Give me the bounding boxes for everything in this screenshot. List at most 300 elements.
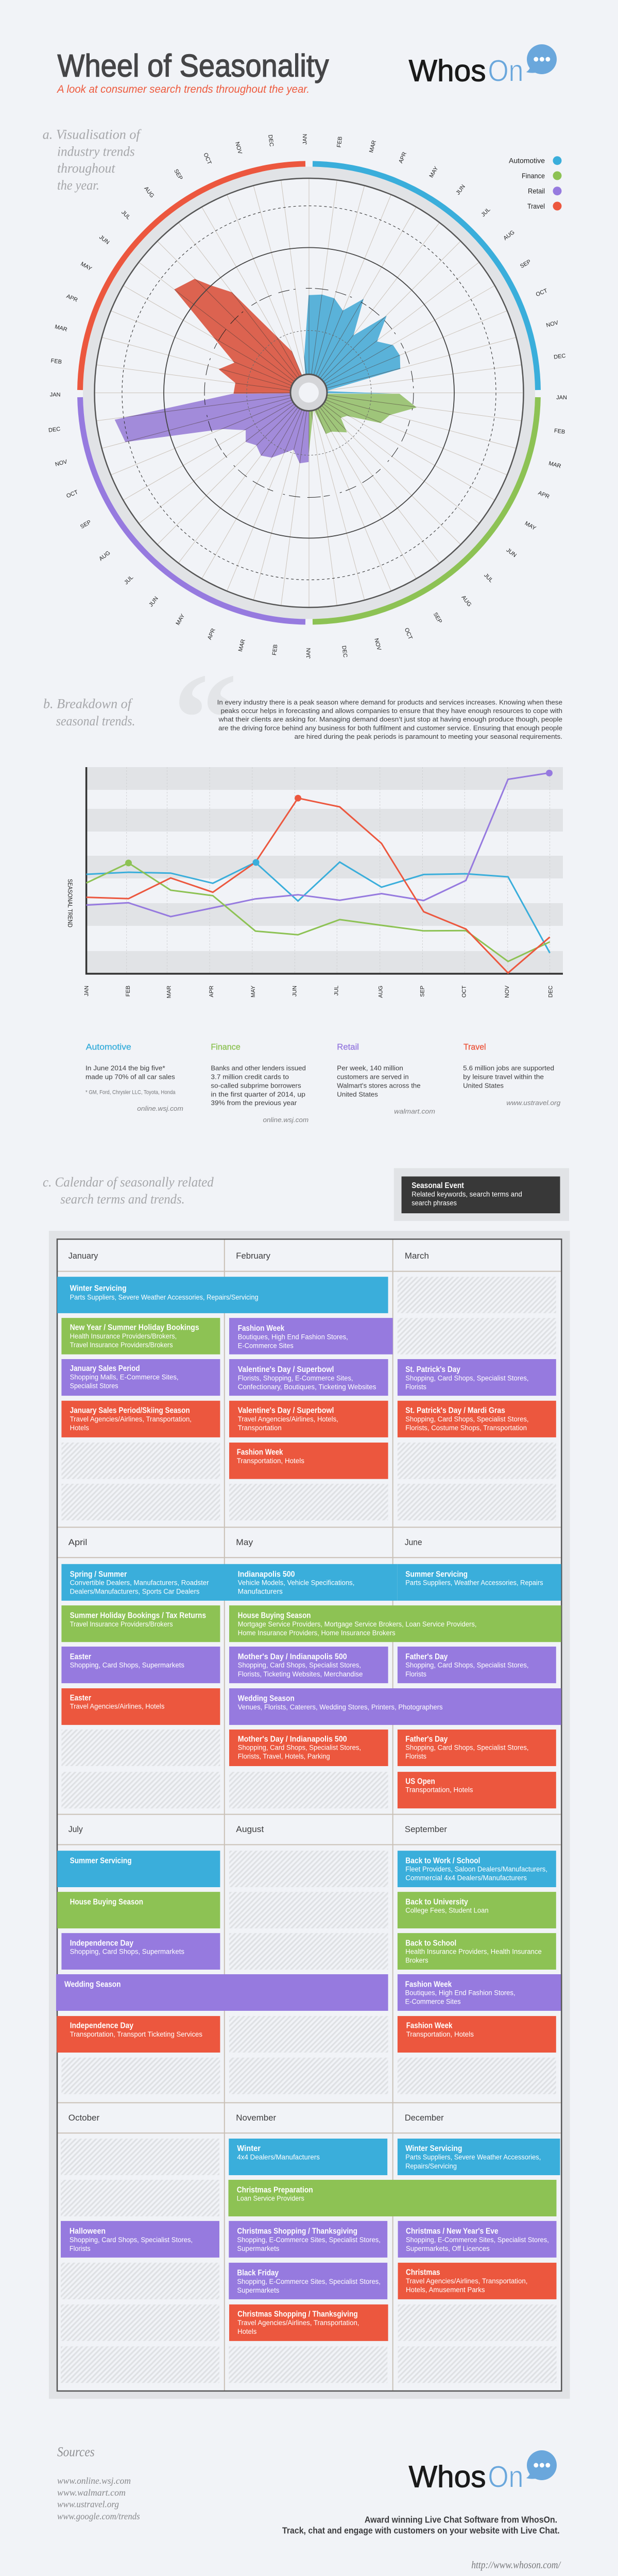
grey ring band — [89, 172, 529, 613]
event: Mother's Day / Indianapolis 500 (travel) — [229, 1730, 388, 1766]
legend: industries: Automotive — [509, 157, 545, 165]
event: Christmas Preparation: Christmas Preparation — [237, 2185, 313, 2194]
event: Valentine's Day / Superbowl (travel): Valentine's Day / Superbowl — [238, 1406, 334, 1415]
month headers: August — [236, 1824, 264, 1834]
stat: travel: by leisure travel within the — [463, 1073, 544, 1081]
event: January Sales Period: Specialist Stores — [70, 1382, 118, 1389]
x axis month labels: AUG — [377, 986, 384, 998]
event: St. Patrick's Day / Mardi Gras: Shopping, Card Shops, Specialist Stores, — [405, 1415, 528, 1423]
event: Wedding Season (May-June): Wedding Season — [238, 1694, 295, 1703]
stat: automotive: online.wsj.com — [137, 1105, 183, 1112]
month labels around wheel: MAR — [54, 324, 68, 333]
wedge: finance — [308, 393, 417, 455]
month labels around wheel: FEB — [554, 428, 565, 435]
event: House Buying Season (July): House Buying Season — [70, 1898, 143, 1906]
month labels around wheel: NOV — [545, 319, 559, 329]
event: House Buying Season (July) — [57, 1892, 220, 1928]
stat: finance: online.wsj.com — [263, 1116, 308, 1124]
event: Summer Servicing (July): Summer Servicing — [70, 1857, 132, 1865]
event: Back to University: Back to University — [405, 1898, 468, 1906]
month headers — [68, 1251, 447, 2123]
stat: retail: Walmart's stores across the — [337, 1082, 421, 1090]
event: House Buying Season (May-June): House Buying Season — [238, 1612, 311, 1620]
event: Father's Day (retail) — [398, 1647, 556, 1683]
event: Christmas Shopping / Thanksgiving (travel): Christmas Shopping / Thanksgiving — [237, 2310, 358, 2319]
x axis month labels — [83, 985, 554, 998]
event: Spring / Summer: Spring / Summer — [70, 1570, 127, 1579]
intro paragraph: what their clients are asking for. Managing demand doesn’t just stop at having enough produce though, people — [218, 716, 562, 723]
spokes over wedges — [125, 279, 416, 464]
event: Winter Servicing (December): Parts Suppliers, Severe Weather Accessories, — [405, 2154, 541, 2161]
month labels around wheel: MAY — [524, 520, 537, 532]
wedge: retail — [115, 393, 309, 463]
month labels around wheel: AUG — [460, 595, 472, 608]
stat: retail: walmart.com — [394, 1108, 435, 1115]
section c heading — [43, 1175, 214, 1207]
event: Fashion Week (Feb travel): Transportation, Hotels — [237, 1457, 304, 1465]
month labels around wheel: SEP — [79, 519, 92, 530]
event: Black Friday: Black Friday — [237, 2269, 279, 2278]
x axis month labels: JUN — [292, 986, 298, 996]
event: Easter (travel) — [61, 1688, 220, 1725]
month labels around wheel: DEC — [340, 645, 348, 658]
month headers: January — [68, 1251, 98, 1261]
stat: automotive: In June 2014 the big five* — [85, 1064, 165, 1072]
event: Valentine's Day / Superbowl (retail) — [229, 1359, 388, 1396]
calendar frame — [49, 1231, 570, 2399]
event: Christmas / New Year's Eve — [398, 2221, 556, 2258]
event: Halloween: Halloween — [70, 2227, 106, 2236]
month labels around wheel: JUN — [148, 596, 160, 608]
chart bands — [87, 767, 563, 973]
month labels around wheel: MAR — [237, 638, 247, 652]
event: Winter Servicing (December): Repairs/Servicing — [405, 2162, 457, 2170]
event: Fashion Week (Feb travel) — [229, 1443, 388, 1479]
section a heading — [43, 127, 142, 193]
event: Valentine's Day / Superbowl (retail): Florists, Shopping, E-Commerce Sites, — [238, 1374, 353, 1382]
event: Back to School: Health Insurance Providers, Health Insurance — [405, 1947, 542, 1956]
footer tagline: Award winning Live Chat Software from WhosOn. — [365, 2515, 557, 2525]
event: Halloween: Florists — [70, 2245, 91, 2252]
sources: www.walmart.com — [57, 2487, 126, 2498]
month labels around wheel: MAR — [368, 140, 377, 154]
event: Back to University — [398, 1892, 556, 1928]
footer url: http://www.whoson.com/ — [471, 2560, 561, 2571]
event: Father's Day (travel): Florists — [405, 1753, 426, 1760]
event: Halloween: Shopping, Card Shops, Specialist Stores, — [70, 2236, 193, 2244]
intro paragraph — [217, 699, 562, 740]
event: Wedding Season (May-June) — [229, 1688, 561, 1725]
event: Back to School — [398, 1933, 556, 1970]
month labels around wheel: JUL — [123, 574, 134, 586]
month labels around wheel: MAY — [428, 165, 440, 179]
retail arc — [80, 397, 305, 622]
event: Back to Work / School: Back to Work / School — [405, 1857, 480, 1865]
stat: automotive: * GM, Ford, Chrysler LLC, Toyota, Honda — [85, 1089, 176, 1095]
event: Winter — [229, 2139, 387, 2175]
x axis month labels: DEC — [547, 986, 554, 997]
event: January Sales Period: January Sales Period — [70, 1364, 140, 1373]
wheel of seasonality chart — [48, 134, 567, 658]
line chart: seasonal trends — [66, 767, 563, 998]
event: Back to School: Brokers — [405, 1957, 428, 1964]
intro paragraph: are hired during the peak periods is paramount to meeting your seasonal requirements. — [295, 733, 562, 740]
sources: www.online.wsj.com — [57, 2476, 131, 2486]
event: St. Patrick's Day (retail) — [398, 1359, 556, 1396]
section c heading: search terms and trends. — [60, 1192, 185, 1207]
event: Christmas Shopping / Thanksgiving (travel): Travel Agencies/Airlines, Transportation, — [237, 2319, 359, 2327]
series: travel — [87, 798, 550, 973]
event: Summer Holiday Bookings / Tax Returns: Summer Holiday Bookings / Tax Returns — [70, 1612, 206, 1620]
month labels around wheel: APR — [398, 151, 408, 164]
event: St. Patrick's Day (retail): St. Patrick's Day — [405, 1365, 460, 1374]
x axis month labels: NOV — [504, 985, 510, 998]
month labels around wheel: FEB — [271, 644, 279, 656]
month headers: September — [405, 1824, 447, 1834]
event: Summer Holiday Bookings / Tax Returns: Travel Insurance Providers/Brokers — [70, 1620, 173, 1628]
section a heading: industry trends — [57, 144, 135, 159]
stat: travel — [463, 1042, 561, 1107]
month labels around wheel: JUL — [483, 572, 494, 584]
event: Valentine's Day / Superbowl (travel): Travel Angencies/Airlines, Hotels, — [238, 1415, 338, 1423]
y axis label: SEASONAL TREND — [66, 879, 74, 927]
peak markers — [125, 770, 553, 867]
event: Independence Day (retail): Independence Day — [70, 1939, 133, 1947]
sources: www.google.com/trends — [57, 2511, 140, 2521]
intro paragraph: are the driving force behind any business for both fulfilment and customer service. Ensuring that enough people — [218, 724, 562, 732]
wedge: travel — [174, 279, 309, 394]
event: Christmas Shopping / Thanksgiving (retail): Shopping, E-Commerce Sites, Specialist Stores, — [237, 2236, 381, 2244]
legend: industries: Travel — [527, 202, 545, 210]
stat: finance: Finance — [211, 1042, 241, 1052]
x axis month labels: OCT — [461, 986, 468, 997]
event: House Buying Season (May-June): Home Insurance Providers, Home Insurance Brokers — [238, 1629, 396, 1637]
icon: large quotation mark: “ — [173, 647, 237, 790]
stat: finance — [211, 1042, 308, 1124]
section c heading: c. Calendar of seasonally related — [43, 1175, 214, 1190]
legend: industries — [509, 156, 561, 210]
event: Independence Day (travel): Independence Day — [70, 2021, 133, 2030]
event: Back to Work / School — [398, 1851, 556, 1887]
event: January Sales Period: Shopping Malls, E-Commerce Sites, — [70, 1373, 179, 1381]
event: Father's Day (travel): Shopping, Card Shops, Specialist Stores, — [405, 1744, 528, 1752]
event: Fashion Week (Feb retail): Fashion Week — [238, 1324, 285, 1333]
event: US Open: Transportation, Hotels — [405, 1786, 473, 1794]
month labels around wheel: DEC — [267, 134, 274, 147]
event: Mother's Day / Indianapolis 500 (travel): Shopping, Card Shops, Specialist Stores, — [238, 1744, 361, 1752]
month headers: July — [68, 1824, 83, 1834]
series: retail — [87, 773, 550, 917]
month headers: November — [236, 2113, 276, 2123]
event: Summer Servicing (July) — [57, 1851, 220, 1887]
event: Christmas (travel) — [398, 2263, 556, 2299]
stat: automotive — [85, 1042, 183, 1112]
event: Father's Day (retail): Shopping, Card Shops, Specialist Stores, — [405, 1662, 528, 1669]
month labels around wheel: DEC — [48, 426, 61, 434]
wedge: automotive — [304, 295, 400, 394]
event: Easter (retail) — [61, 1647, 220, 1683]
month labels around wheel: JAN — [305, 648, 312, 658]
event: Fashion Week (Feb retail): Boutiques, High End Fashion Stores, — [238, 1333, 348, 1341]
month headers: May — [236, 1537, 253, 1547]
event: January Sales Period/Skiing Season: Hotels — [70, 1424, 89, 1432]
event: Christmas Shopping / Thanksgiving (travel) — [229, 2304, 388, 2341]
x axis month labels: MAY — [250, 985, 256, 997]
x axis month labels: MAR — [166, 986, 172, 998]
event: Independence Day (retail) — [61, 1933, 220, 1970]
month labels around wheel: NOV — [55, 459, 68, 468]
event: Christmas (travel): Christmas — [406, 2268, 440, 2277]
x axis month labels: FEB — [125, 986, 131, 996]
stat: finance: Banks and other lenders issued — [211, 1064, 306, 1072]
event: Easter (retail): Easter — [70, 1653, 91, 1661]
event: Valentine's Day / Superbowl (travel) — [229, 1401, 388, 1437]
event: Summer Servicing (June) — [397, 1564, 561, 1601]
event: Mother's Day / Indianapolis 500 (travel): Mother's Day / Indianapolis 500 — [238, 1735, 347, 1743]
event: Summer Servicing (June): Parts Suppliers, Weather Accessories, Repairs — [405, 1579, 543, 1587]
month labels around wheel: JAN — [556, 395, 567, 401]
event: Spring / Summer — [61, 1564, 229, 1601]
event: Independence Day (retail): Shopping, Card Shops, Supermarkets — [70, 1947, 184, 1956]
legend: seasonal event key: search phrases — [411, 1199, 457, 1207]
event: Winter Servicing: Winter Servicing — [70, 1284, 127, 1293]
title block — [56, 48, 329, 95]
event: Back to Work / School: Fleet Providers, Saloon Dealers/Manufacturers, — [405, 1865, 547, 1873]
stat: finance: 39% from the previous year — [211, 1099, 297, 1107]
x axis month labels: JUL — [334, 986, 340, 996]
stat: finance: so-called subprime borrowers — [211, 1082, 301, 1090]
centre hub — [290, 374, 327, 411]
month headers: December — [405, 2113, 444, 2123]
logo: WhosOn footer: On — [488, 2460, 523, 2494]
month labels around wheel: AUG — [143, 185, 155, 199]
x axis month labels: JAN — [83, 986, 90, 996]
x axis month labels: APR — [209, 986, 215, 997]
footer tagline: Track, chat and engage with customers on your website with Live Chat. — [282, 2526, 560, 2536]
month labels around wheel: DEC — [554, 353, 566, 361]
month labels around wheel: JUL — [120, 209, 131, 221]
legend: industries: Retail — [528, 187, 545, 195]
section b heading: b. Breakdown of — [43, 697, 133, 711]
event: Indianapolis 500: Manufacturers — [238, 1588, 283, 1596]
stat: automotive: Automotive — [86, 1042, 131, 1052]
event: Winter Servicing — [57, 1277, 388, 1313]
logo: WhosOn footer — [409, 2450, 557, 2494]
month headers: October — [68, 2113, 99, 2123]
event: Easter (retail): Shopping, Card Shops, Supermarkets — [70, 1662, 184, 1669]
month labels around wheel: NOV — [373, 638, 382, 651]
month labels around wheel: OCT — [202, 152, 213, 165]
section a heading: a. Visualisation of — [43, 127, 142, 142]
logo: WhosOn header — [409, 44, 557, 88]
section a heading: throughout — [57, 161, 115, 176]
event: New Year / Summer Holiday Bookings: New Year / Summer Holiday Bookings — [70, 1323, 199, 1332]
event: US Open: US Open — [405, 1777, 435, 1786]
event: Christmas Shopping / Thanksgiving (retail) — [229, 2221, 387, 2258]
event: Christmas (travel): Travel Agencies/Airlines, Transportation, — [406, 2277, 527, 2285]
month labels around wheel: JUN — [455, 183, 467, 196]
hatched empty cells — [61, 1277, 557, 2383]
month labels around wheel: SEP — [432, 612, 443, 624]
event: Easter (travel): Easter — [70, 1693, 91, 1702]
title: Wheel of Seasonality — [58, 48, 329, 83]
month labels around wheel: SEP — [519, 259, 532, 269]
event: Independence Day (travel): Transportation, Transport Ticketing Services — [70, 2030, 202, 2038]
event: Fashion Week (Sept retail): Fashion Week — [405, 1980, 452, 1989]
event: Summer Servicing (June): Summer Servicing — [405, 1570, 468, 1579]
event: Father's Day (retail): Father's Day — [405, 1653, 448, 1661]
x axis month labels: SEP — [419, 986, 425, 997]
month labels around wheel: AUG — [502, 229, 516, 242]
event: Christmas Shopping / Thanksgiving (travel): Hotels — [237, 2328, 257, 2335]
event: Mother's Day / Indianapolis 500 (travel): Florists, Travel, Hotels, Parking — [238, 1753, 330, 1760]
intro paragraph: In every industry there is a peak season where demand for products and services increases. Knowing when these — [217, 699, 562, 706]
stat: travel: United States — [463, 1082, 504, 1090]
event: Fashion Week (Feb retail) — [229, 1318, 393, 1354]
event: Mother's Day / Indianapolis 500 (retail): Shopping, Card Shops, Specialist Stores, — [238, 1662, 361, 1669]
month headers: March — [405, 1251, 429, 1261]
stat: finance: in the first quarter of 2014, up — [211, 1091, 305, 1098]
event: Father's Day (travel) — [398, 1730, 556, 1766]
event: Fashion Week (Sept travel) — [398, 2016, 556, 2053]
event: Winter: Winter — [237, 2144, 261, 2153]
panel: calendar — [49, 1231, 570, 2399]
month labels around wheel: MAY — [79, 261, 93, 273]
month labels around wheel: JUN — [505, 547, 518, 558]
month labels around wheel: OCT — [403, 627, 414, 640]
month labels around wheel — [48, 134, 567, 658]
event: Spring / Summer: Dealers/Manufacturers, Sports Car Dealers — [70, 1588, 200, 1596]
footer tagline — [282, 2515, 560, 2536]
stat: retail: Per week, 140 million — [337, 1064, 403, 1072]
logo: WhosOn footer: Whos — [409, 2460, 486, 2494]
month headers: February — [236, 1251, 270, 1261]
section b heading: seasonal trends. — [56, 714, 135, 728]
legend: seasonal event key: Seasonal Event — [411, 1181, 464, 1190]
event: Indianapolis 500: Indianapolis 500 — [238, 1570, 295, 1579]
event: Christmas / New Year's Eve: Shopping, E-Commerce Sites, Specialist Stores, — [406, 2236, 549, 2244]
event: Father's Day (retail): Florists — [405, 1670, 426, 1678]
month labels around wheel: APR — [65, 293, 78, 303]
event: St. Patrick's Day (retail): Florists — [405, 1383, 426, 1391]
event: House Buying Season (May-June) — [229, 1605, 561, 1642]
event: St. Patrick's Day (retail): Shopping, Card Shops, Specialist Stores, — [405, 1374, 528, 1382]
event: St. Patrick's Day / Mardi Gras: Florists, Costume Shops, Transportation — [405, 1424, 527, 1432]
event: US Open — [398, 1772, 556, 1808]
event: Fashion Week (Sept travel): Fashion Week — [406, 2021, 453, 2030]
month labels around wheel: JAN — [302, 134, 308, 145]
event: House Buying Season (May-June): Mortgage Service Providers, Mortgage Service Brokers, Loan Service Providers, — [238, 1620, 477, 1628]
event: January Sales Period — [61, 1359, 220, 1396]
finance arc — [313, 397, 538, 622]
event: New Year / Summer Holiday Bookings: Health Insurance Providers/Brokers, — [70, 1332, 177, 1340]
month headers: April — [68, 1537, 87, 1547]
legend: seasonal event key — [394, 1168, 569, 1221]
logo: WhosOn header: On — [488, 54, 523, 88]
month labels around wheel: JUL — [480, 207, 492, 218]
event: Winter Servicing: Parts Suppliers, Severe Weather Accessories, Repairs/Servicing — [70, 1293, 259, 1301]
event: Back to Work / School: Commercial 4x4 Dealers/Manufacturers — [405, 1874, 527, 1882]
event: New Year / Summer Holiday Bookings: Travel Insurance Providers/Brokers — [70, 1341, 173, 1349]
legend: industries: Finance — [522, 172, 545, 180]
legend: seasonal event key: Related keywords, search terms and — [411, 1190, 522, 1198]
event: Christmas Shopping / Thanksgiving (retail): Christmas Shopping / Thanksgiving — [237, 2227, 357, 2236]
event: January Sales Period/Skiing Season: January Sales Period/Skiing Season — [70, 1406, 190, 1415]
stat: retail: Retail — [337, 1042, 359, 1052]
month headers: June — [405, 1537, 422, 1547]
month labels around wheel: JUN — [98, 234, 110, 246]
event: Independence Day (travel) — [57, 2016, 220, 2053]
event: Christmas Preparation: Loan Service Providers — [237, 2195, 304, 2202]
event: Fashion Week (Sept retail) — [398, 1974, 561, 2011]
month labels around wheel: OCT — [65, 489, 79, 499]
intro paragraph: peaks occur helps in forecasting and allows companies to ensure that they have enough resources to cope with — [221, 707, 562, 715]
section a heading: the year. — [57, 178, 99, 193]
event: Winter: 4x4 Dealers/Manufacturers — [237, 2154, 320, 2161]
event: Wedding Season (July-August) — [56, 1974, 388, 2011]
event: Mother's Day / Indianapolis 500 (retail) — [229, 1647, 388, 1683]
month labels around wheel: AUG — [98, 550, 111, 562]
event: Back to School: Back to School — [405, 1939, 456, 1947]
event: Christmas Preparation — [229, 2180, 556, 2216]
series: automotive — [87, 862, 550, 953]
event: Fashion Week (Sept retail): Boutiques, High End Fashion Stores, — [405, 1989, 516, 1996]
event: Indianapolis 500 — [229, 1564, 397, 1601]
series: finance — [87, 863, 550, 961]
event: Easter (travel): Travel Agencies/Airlines, Hotels — [70, 1703, 165, 1710]
event: Fashion Week (Sept retail): E-Commerce Sites — [405, 1998, 461, 2005]
event: Halloween — [61, 2221, 219, 2258]
stat: travel: www.ustravel.org — [506, 1099, 561, 1107]
stat: automotive: made up 70% of all car sales — [85, 1073, 175, 1081]
event: Mother's Day / Indianapolis 500 (retail): Florists, Ticketing Websites, Merchandise — [238, 1670, 363, 1678]
logo: WhosOn header: Whos — [409, 54, 486, 88]
month labels around wheel: MAY — [175, 613, 186, 626]
stat: finance: 3.7 million credit cards to — [211, 1073, 289, 1081]
sources: www.ustravel.org — [57, 2499, 119, 2510]
stat: travel: 5.6 million jobs are supported — [463, 1064, 554, 1072]
automotive arc — [313, 164, 538, 390]
vertical gridlines — [127, 767, 550, 973]
section b heading — [43, 697, 135, 728]
event: St. Patrick's Day / Mardi Gras: St. Patrick's Day / Mardi Gras — [405, 1406, 505, 1415]
event: Black Friday — [229, 2263, 387, 2299]
month labels around wheel: SEP — [173, 168, 184, 181]
month labels around wheel: MAR — [548, 461, 562, 469]
event: Wedding Season (May-June): Venues, Florists, Caterers, Wedding Stores, Printers, Photographers — [238, 1703, 443, 1711]
event: January Sales Period/Skiing Season — [61, 1401, 220, 1437]
month labels around wheel: FEB — [50, 358, 62, 365]
reference circles — [95, 178, 523, 607]
event: St. Patrick's Day / Mardi Gras — [398, 1401, 556, 1437]
event: January Sales Period/Skiing Season: Travel Agencies/Airlines, Transportation, — [70, 1415, 192, 1423]
sources — [57, 2445, 140, 2521]
event: Fashion Week (Feb travel): Fashion Week — [237, 1448, 283, 1457]
event: Christmas (travel): Hotels, Amusement Parks — [406, 2286, 485, 2294]
travel arc — [80, 164, 305, 390]
event: Christmas / New Year's Eve: Supermarkets, Off Licences — [406, 2245, 490, 2252]
sources: Sources — [57, 2445, 95, 2460]
radial spokes — [95, 178, 523, 607]
event: Fashion Week (Sept travel): Transportation, Hotels — [406, 2030, 474, 2038]
event: Black Friday: Shopping, E-Commerce Sites, Specialist Stores, — [237, 2278, 381, 2285]
event: Wedding Season (July-August): Wedding Season — [64, 1980, 121, 1989]
stat: retail — [337, 1042, 435, 1115]
month labels around wheel: JAN — [50, 392, 61, 398]
month labels around wheel: FEB — [336, 136, 344, 148]
event: New Year / Summer Holiday Bookings — [61, 1318, 220, 1354]
event: Valentine's Day / Superbowl (retail): Valentine's Day / Superbowl — [238, 1365, 334, 1374]
